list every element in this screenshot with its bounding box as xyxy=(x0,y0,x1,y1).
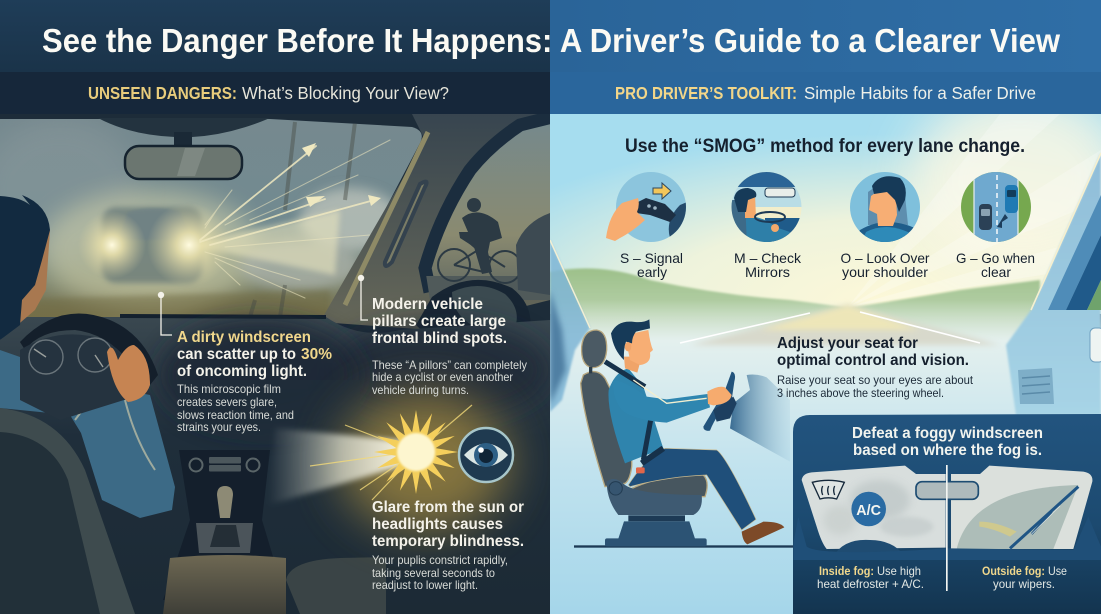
scene: cream haze xyxy=(891,114,1101,248)
callout: dirty windscreen: slows reaction time, and xyxy=(177,408,294,422)
text: outside fog: your wipers. xyxy=(993,577,1055,591)
illustration: centre console xyxy=(163,450,386,614)
heading: defeat fog: Defeat a foggy windscreen xyxy=(852,425,1043,442)
text: inside fog: heat defroster + A/C. xyxy=(817,577,924,591)
left section heading: UNSEEN DANGERS: xyxy=(88,83,237,103)
label: signal xyxy=(620,253,682,280)
left section heading xyxy=(88,83,449,103)
illustration: split windscreen xyxy=(793,465,1101,591)
legs xyxy=(628,448,756,530)
header band left xyxy=(0,0,550,72)
callout: vehicle pillars xyxy=(358,275,527,397)
floor line xyxy=(574,545,793,548)
text: outside fog xyxy=(982,564,1067,591)
callout: vehicle pillars: frontal blind spots. xyxy=(372,330,507,347)
text: adjust your seat: optimal control and vision. xyxy=(777,352,969,369)
glare rays and arrows xyxy=(200,140,390,298)
steering column shadow xyxy=(730,375,790,462)
icon: steering wheel and gauges xyxy=(20,314,158,420)
callout: glare: taking several seconds to xyxy=(372,566,495,580)
callout: dirty windscreen xyxy=(158,292,332,434)
right section heading xyxy=(615,83,1036,103)
text: adjust your seat: Adjust your seat for xyxy=(777,335,918,352)
label: go when clear: clear xyxy=(981,264,1011,280)
label: check mirrors: Mirrors xyxy=(745,264,790,280)
label: signal: early xyxy=(637,264,667,280)
label: look over shoulder: your shoulder xyxy=(842,264,928,280)
header band right xyxy=(550,0,1101,72)
text: adjust your seat xyxy=(777,335,974,400)
callout: vehicle pillars: vehicle during turns. xyxy=(372,383,469,397)
label: look over shoulder: O – Look Over xyxy=(840,250,930,266)
right subheader band xyxy=(550,72,1101,114)
icon: go when clear xyxy=(961,170,1031,244)
steering wheel xyxy=(703,372,737,431)
label: go when clear: G – Go when xyxy=(956,250,1035,266)
illustration: rear-view mirror xyxy=(98,118,270,179)
illustration: driver xyxy=(0,195,175,518)
illustration: pillar and side window xyxy=(324,114,550,329)
icon: look over shoulder xyxy=(850,172,920,242)
scene: right pillar and dash xyxy=(1006,153,1101,415)
callout: dirty windscreen: creates severs glare, xyxy=(177,395,277,409)
text: inside fog: Inside fog: xyxy=(819,564,874,578)
heading: defeat fog: based on where the fog is. xyxy=(853,442,1042,459)
left section heading: What’s Blocking Your View? xyxy=(242,83,449,103)
icon: hand on wheel xyxy=(107,345,150,402)
rear-view mirror xyxy=(916,482,978,499)
right section heading: PRO DRIVER’S TOOLKIT: xyxy=(615,83,797,103)
panel: pro driver toolkit xyxy=(550,90,1101,614)
icon: signal xyxy=(606,172,692,242)
hand xyxy=(707,387,732,405)
icon: A/C badge xyxy=(851,492,886,526)
icon: defrost xyxy=(812,480,844,499)
label: signal: S – Signal xyxy=(620,250,683,266)
scene: light rays xyxy=(852,114,1060,304)
right section heading: Simple Habits for a Safer Drive xyxy=(804,83,1036,103)
icon: eye xyxy=(459,428,513,482)
callout: dirty windscreen: This microscopic film xyxy=(177,382,281,396)
panel: foggy windscreen xyxy=(793,414,1101,614)
callout: glare: headlights causes xyxy=(372,516,503,533)
illustration: dashboard xyxy=(0,304,550,410)
callout: vehicle pillars: These “A pillors” can completely xyxy=(372,358,527,372)
text: outside fog: Outside fog: xyxy=(982,564,1045,578)
divider xyxy=(946,465,948,591)
outside fog half xyxy=(951,466,1092,549)
callout: dirty windscreen: 30% xyxy=(301,346,332,363)
callout: vehicle pillars: pillars create large xyxy=(372,313,506,330)
shoe xyxy=(742,522,784,544)
callout: dirty windscreen: of oncoming light. xyxy=(177,363,307,380)
scene: hills and road xyxy=(550,268,1101,614)
text: inside fog xyxy=(817,564,924,591)
label: look over shoulder xyxy=(841,253,930,280)
icon: sun xyxy=(374,410,458,494)
illustration: dirty windscreen with glare xyxy=(0,119,422,317)
label: go when clear xyxy=(956,253,1034,277)
seat belt xyxy=(605,362,651,460)
glare beam and sun xyxy=(268,392,513,532)
seat pedestal xyxy=(605,515,707,546)
callout: glare: Your puplis constrict rapidly, xyxy=(372,553,508,567)
scene: sky xyxy=(550,114,1101,314)
inside fog half xyxy=(802,466,946,549)
title: See the Danger Before It Happens: A Driver’s Guide to a Clearer View xyxy=(42,22,1060,59)
callout: glare: readjust to lower light. xyxy=(372,578,478,592)
label: check mirrors xyxy=(735,253,801,277)
text: adjust your seat: Raise your seat so your eyes are about xyxy=(777,373,974,387)
heading: SMOG method: Use the “SMOG” method for every lane change. xyxy=(625,136,1025,157)
panel: unseen dangers car interior xyxy=(0,108,556,614)
heading: defeat fog xyxy=(852,425,1043,459)
torso xyxy=(608,368,663,463)
neck and head xyxy=(611,319,653,373)
icon: car silhouette xyxy=(516,213,550,295)
arm xyxy=(613,380,710,423)
callout: glare: Glare from the sun or xyxy=(372,499,524,516)
callout: glare: temporary blindness. xyxy=(372,533,524,550)
scene: left pillar xyxy=(550,240,590,412)
icon: cyclist silhouette xyxy=(438,198,521,283)
left subheader band xyxy=(0,72,550,114)
text: inside fog: Use high xyxy=(877,564,921,578)
seat back xyxy=(581,330,707,515)
icon: wiper xyxy=(1010,487,1078,548)
label: check mirrors: M – Check xyxy=(734,250,802,266)
text: adjust your seat: 3 inches above the steering wheel. xyxy=(777,386,944,400)
callout: dirty windscreen: strains your eyes. xyxy=(177,420,261,434)
illustration: driver seated in correct position xyxy=(574,319,793,548)
icon: check mirrors xyxy=(732,172,802,242)
callout: glare xyxy=(372,499,524,592)
callout: dirty windscreen: A dirty windscreen xyxy=(177,329,311,346)
callout: vehicle pillars: Modern vehicle xyxy=(372,296,483,313)
icon: A/C badge: A/C xyxy=(856,502,881,519)
text: outside fog: Use xyxy=(1048,564,1067,578)
icon: side mirror xyxy=(416,280,527,329)
callout: vehicle pillars: hide a cyclist or even another xyxy=(372,370,513,384)
callout: dirty windscreen: can scatter up to xyxy=(177,346,296,363)
illustration: driver seat xyxy=(0,408,135,614)
dashboard curve xyxy=(833,540,905,557)
